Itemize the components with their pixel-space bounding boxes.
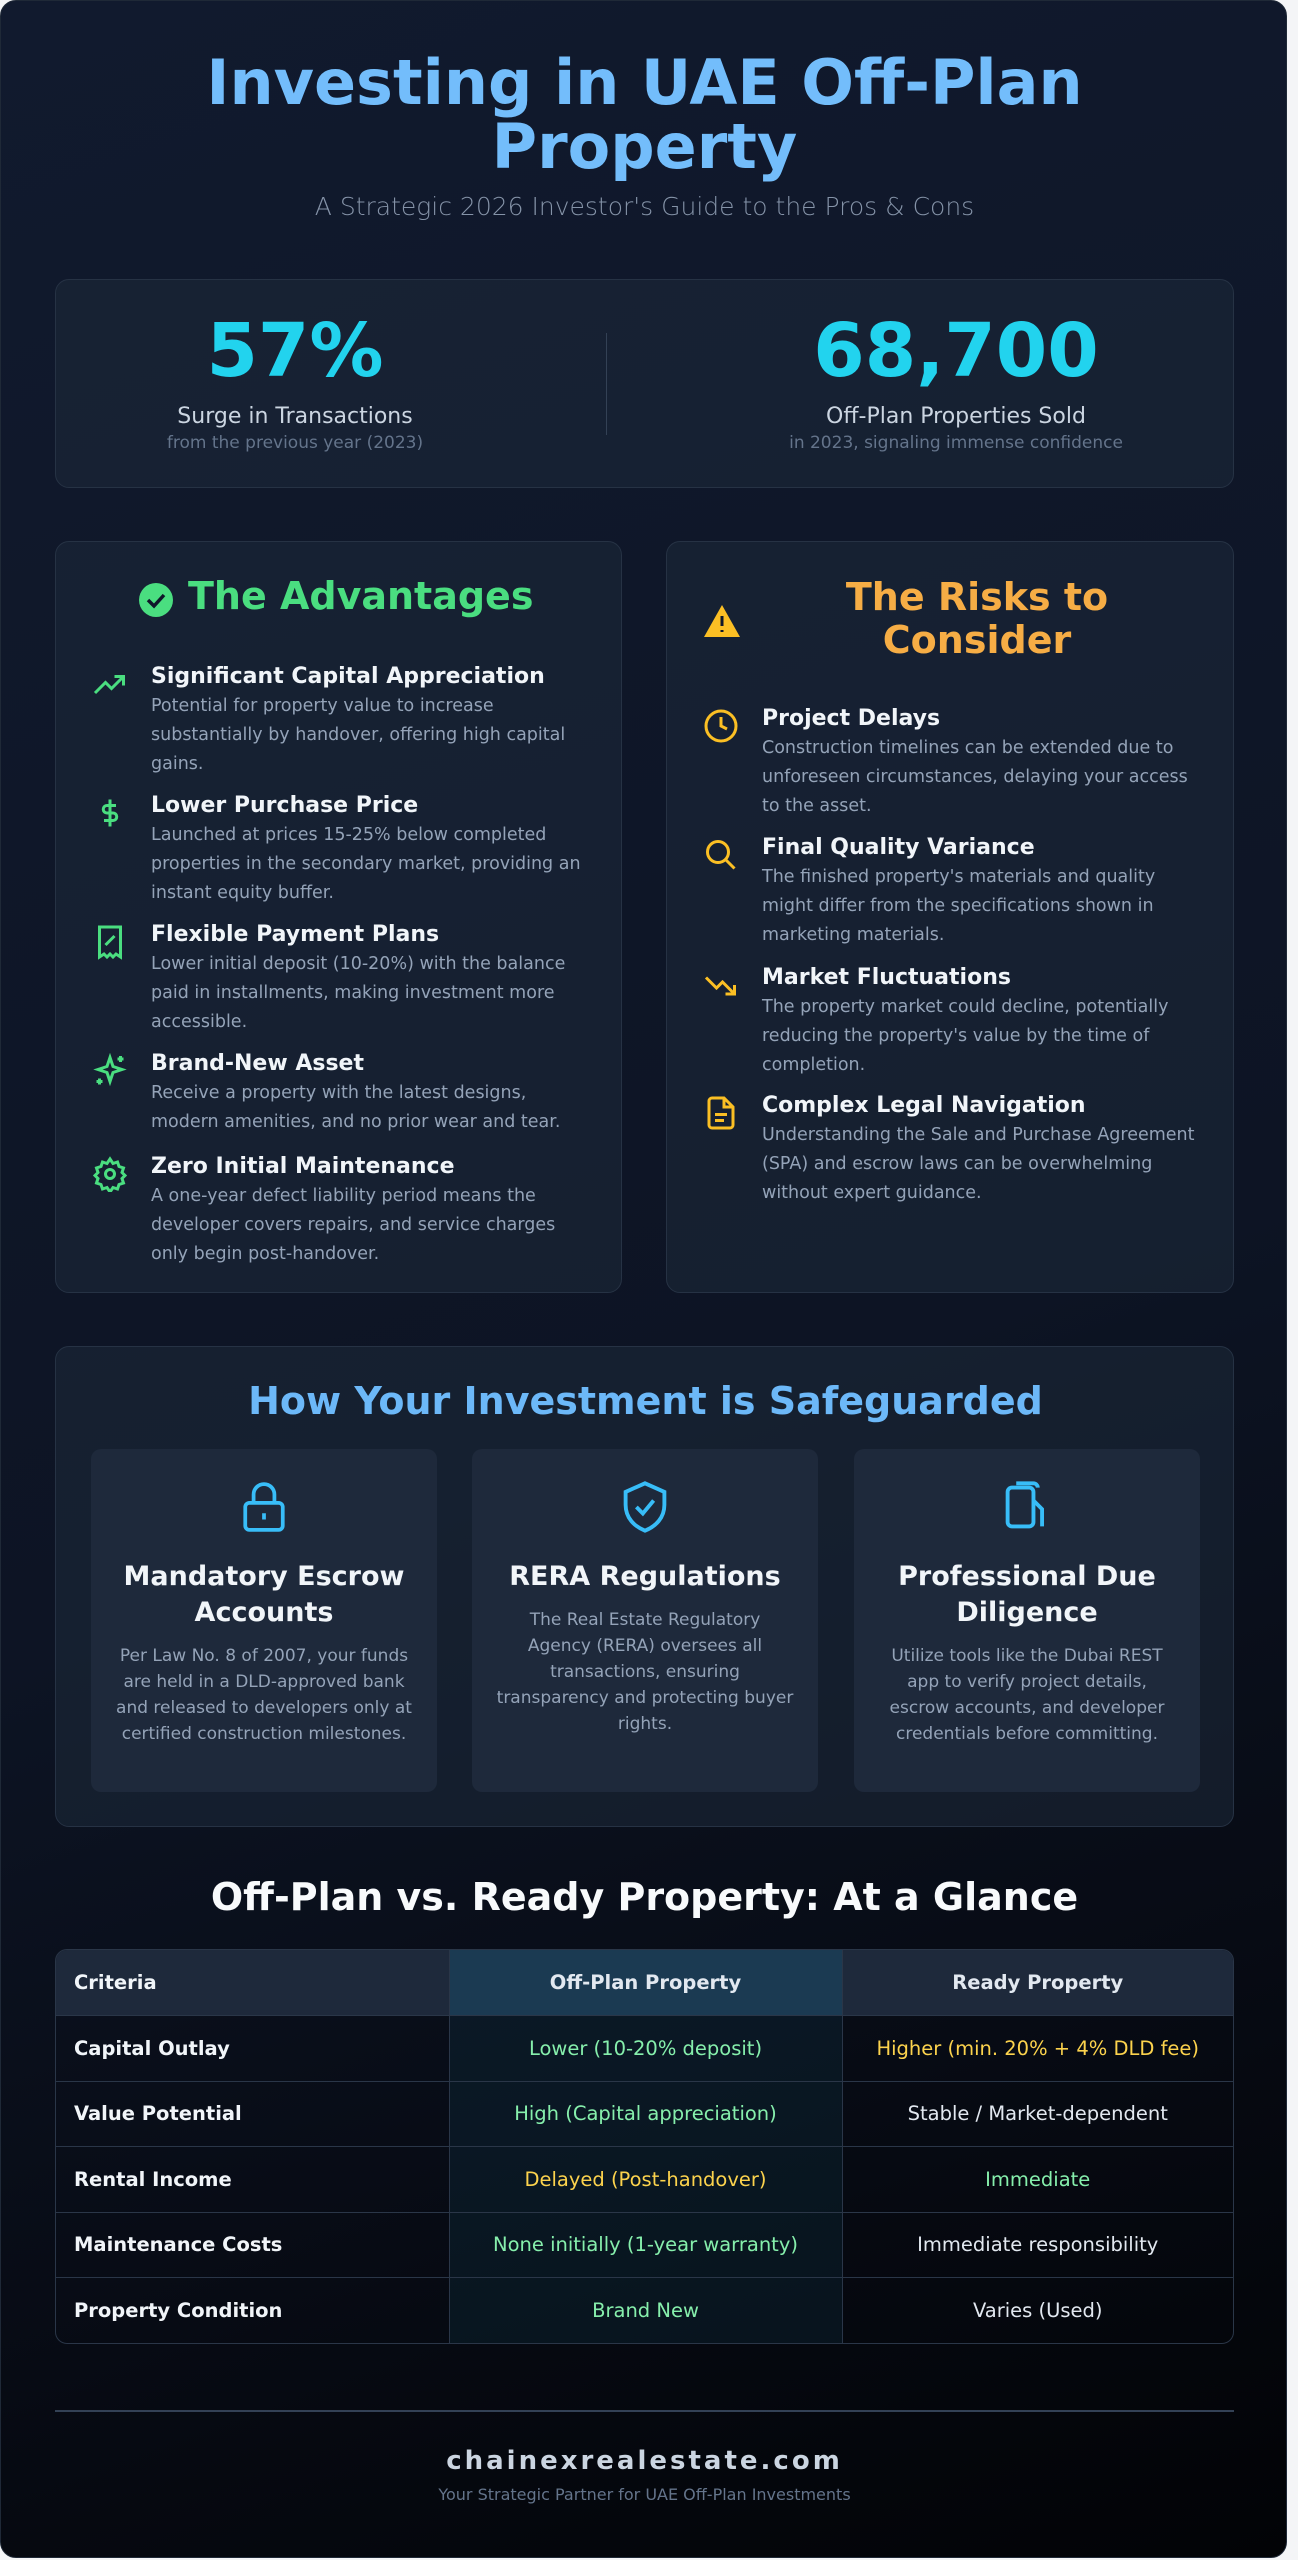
footer: Your Strategic Partner for UAE Off-Plan Investments	[438, 2485, 851, 2504]
comparison table: Immediate responsibility	[917, 2233, 1158, 2256]
item: project delays	[704, 706, 1188, 816]
card: RERA: The Real Estate Regulatory Agency (RERA) oversees all transactions, ensuring transparency and protecting buyer rights.	[497, 1610, 793, 1734]
comparison table: Maintenance Costs	[74, 2233, 282, 2256]
item: market fluctuations: Market Fluctuations	[762, 965, 1011, 990]
item: quality variance	[706, 835, 1155, 945]
stats panel	[55, 279, 1234, 488]
card: escrow: Per Law No. 8 of 2007, your funds are held in a DLD-approved bank and released to developers only at certified construction milestones.	[116, 1646, 412, 1744]
item: quality variance: Final Quality Variance	[762, 835, 1035, 860]
comparison table: Rental Income	[74, 2168, 232, 2191]
item: zero maintenance: Zero Initial Maintenance	[151, 1154, 454, 1179]
card: escrow: Accounts	[195, 1597, 333, 1628]
subtitle: A Strategic 2026 Investor's Guide to the Pros & Cons	[315, 192, 974, 221]
stat: 57%: 57%	[206, 308, 384, 394]
card: escrow: Mandatory Escrow	[124, 1561, 404, 1592]
title: Property	[492, 110, 797, 183]
stat: 68,700	[789, 308, 1123, 453]
card: due diligence	[854, 1449, 1200, 1792]
footer	[438, 2446, 851, 2504]
item: brand new: Receive a property with the latest designs, modern amenities, and no prior wear and tear.	[151, 1083, 560, 1132]
title	[206, 46, 1083, 183]
item: quality variance: The finished property's materials and quality might differ from the specifications shown in marketing materials.	[762, 867, 1155, 945]
comparison table: Criteria	[74, 1971, 157, 1994]
item: market fluctuations: The property market could decline, potentially reducing the property's value by the time of completion.	[762, 997, 1168, 1075]
comparison table: Property Condition	[74, 2299, 282, 2322]
item: project delays: Project Delays	[762, 706, 940, 731]
comparison table: None initially (1-year warranty)	[493, 2233, 798, 2256]
item: brand new	[94, 1051, 560, 1132]
comparison table: Lower (10-20% deposit)	[529, 2037, 762, 2060]
comparison table: Capital Outlay	[74, 2037, 230, 2060]
stat: 68,700: Off-Plan Properties Sold	[826, 404, 1086, 429]
item: brand new: Brand-New Asset	[151, 1051, 364, 1076]
comparison table: Brand New	[592, 2299, 699, 2322]
comparison table: Off-Plan Property	[550, 1971, 741, 1994]
heading: comparison: Off-Plan vs. Ready Property: At a Glance	[211, 1875, 1078, 1919]
item: capital appreciation	[94, 664, 565, 774]
item: lower price: Lower Purchase Price	[151, 793, 418, 818]
panel: risks	[666, 541, 1234, 1293]
comparison table: Higher (min. 20% + 4% DLD fee)	[876, 2037, 1199, 2060]
footer: chainexrealestate.com	[446, 2446, 843, 2476]
comparison table: Delayed (Post-handover)	[524, 2168, 767, 2191]
card: due diligence: Professional Due	[898, 1561, 1156, 1592]
item: capital appreciation: Potential for property value to increase substantially by handover, offering high capital gains.	[151, 696, 565, 774]
item: capital appreciation: Significant Capital Appreciation	[151, 664, 545, 689]
item: market fluctuations	[705, 965, 1168, 1075]
comparison table: Value Potential	[74, 2102, 242, 2125]
card: due diligence: Diligence	[956, 1597, 1098, 1628]
item: legal navigation	[708, 1093, 1195, 1203]
item: legal navigation: Complex Legal Navigation	[762, 1093, 1086, 1118]
card: escrow	[91, 1449, 437, 1792]
heading: risks: The Risks to	[846, 575, 1108, 619]
panel: advantages	[55, 541, 622, 1293]
comparison table: High (Capital appreciation)	[514, 2102, 777, 2125]
item: zero maintenance: A one-year defect liability period means the developer covers repairs, and service charges only begin post-handover.	[151, 1186, 555, 1264]
item: zero maintenance	[93, 1154, 555, 1264]
heading: advantages: The Advantages	[188, 574, 533, 618]
stat: 57%: Surge in Transactions	[177, 404, 413, 429]
comparison table: Stable / Market-dependent	[908, 2102, 1168, 2125]
item: payment plans: Lower initial deposit (10-20%) with the balance paid in installments, making investment more accessible.	[151, 954, 565, 1032]
stat: 57%: from the previous year (2023)	[167, 433, 423, 453]
heading: risks	[704, 575, 1108, 662]
heading: risks: Consider	[883, 618, 1071, 662]
item: lower price	[102, 793, 581, 903]
title: Investing in UAE Off-Plan	[206, 46, 1083, 119]
card: RERA	[472, 1449, 818, 1792]
card: due diligence: Utilize tools like the Dubai REST app to verify project details, escrow accounts, and developer credentials before committing.	[890, 1646, 1164, 1744]
item: payment plans: Flexible Payment Plans	[151, 922, 439, 947]
comparison table	[55, 1949, 1234, 2344]
comparison table: Ready Property	[952, 1971, 1123, 1994]
item: project delays: Construction timelines can be extended due to unforeseen circumstances, delaying your access to the asset.	[762, 738, 1188, 816]
item: lower price: Launched at prices 15-25% below completed properties in the secondary market, providing an instant equity buffer.	[151, 825, 581, 903]
comparison table: Immediate	[985, 2168, 1090, 2191]
stat: 68,700: 68,700	[813, 308, 1099, 394]
stat: 68,700: in 2023, signaling immense confidence	[789, 433, 1123, 453]
stat: 57%	[167, 308, 423, 453]
comparison table: Varies (Used)	[973, 2299, 1103, 2322]
item: payment plans	[98, 922, 565, 1032]
item: legal navigation: Understanding the Sale and Purchase Agreement (SPA) and escrow laws can be overwhelming without expert guidance.	[762, 1125, 1195, 1203]
card: RERA: RERA Regulations	[509, 1561, 781, 1592]
panel: safeguards	[55, 1346, 1234, 1827]
heading: safeguards: How Your Investment is Safeguarded	[248, 1379, 1043, 1423]
